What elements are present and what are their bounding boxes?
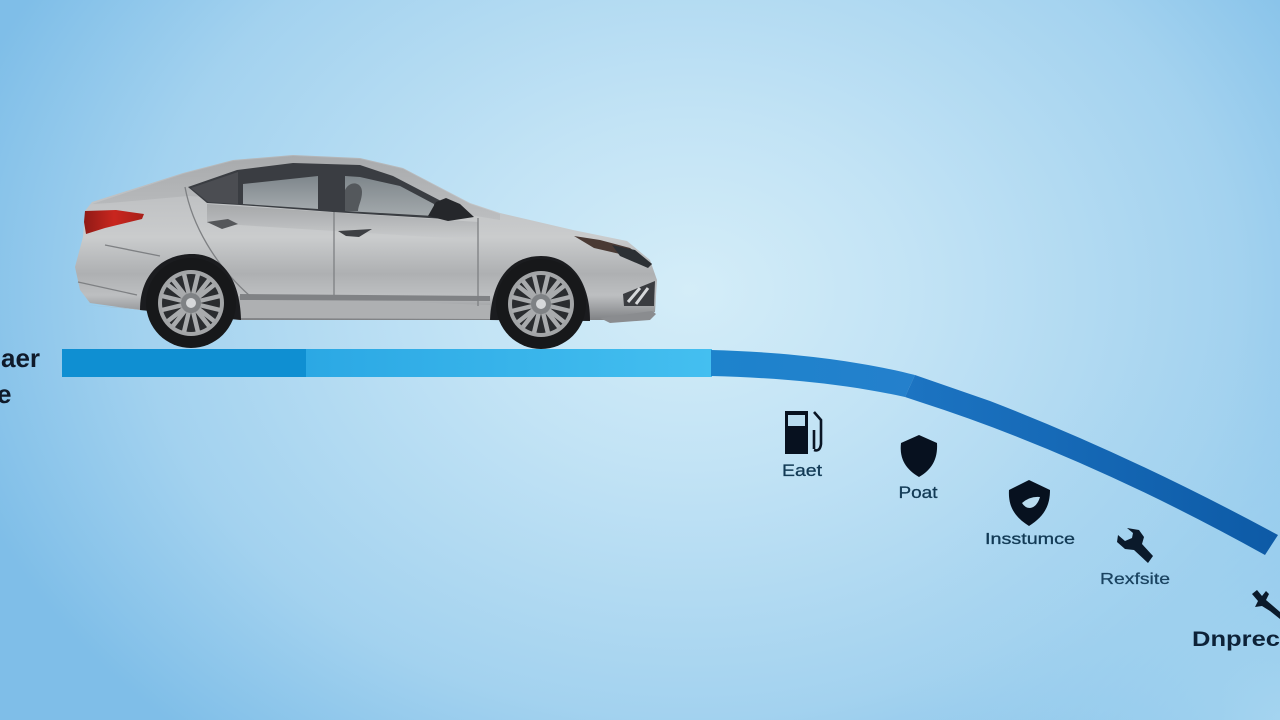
label: Dnprec [1192,628,1280,651]
front grille [623,281,655,306]
declining curve: lower segment [905,375,1278,555]
clipped left label [0,343,40,409]
icon: fuel pump [785,411,821,454]
value bar: second segment [306,349,712,377]
middle window glass [243,176,318,209]
declining curve: upper segment [711,350,915,397]
value bar: first segment [62,349,306,377]
item: repairs [1100,528,1170,588]
label: Rexfsite [1100,571,1170,588]
headlight [574,236,652,267]
icon: insurance shield [1009,480,1050,526]
clipped left label: aer [1,343,40,373]
window frame [188,163,445,219]
item: depreciation [1192,590,1280,651]
car illustration [75,155,657,349]
door seams [78,187,478,306]
label: Poat [898,483,938,502]
label: Insstumce [985,531,1075,548]
item: insurance [985,480,1075,548]
rear quarter glass [191,172,238,204]
label: Eaet [782,461,822,480]
rear wheel arch [140,254,241,320]
door handles [207,219,238,229]
icon: clipped tool [1252,590,1280,619]
front window glass [345,176,434,216]
side mirror [428,198,474,221]
car body [75,155,657,320]
rear wheel [146,258,236,348]
front wheel arch [490,256,590,321]
icon: wrench [1117,528,1153,563]
item: fuel [782,411,822,480]
front wheel [496,259,586,349]
tail light [84,210,144,234]
icon: shield [901,435,937,477]
item: shield [898,435,938,502]
